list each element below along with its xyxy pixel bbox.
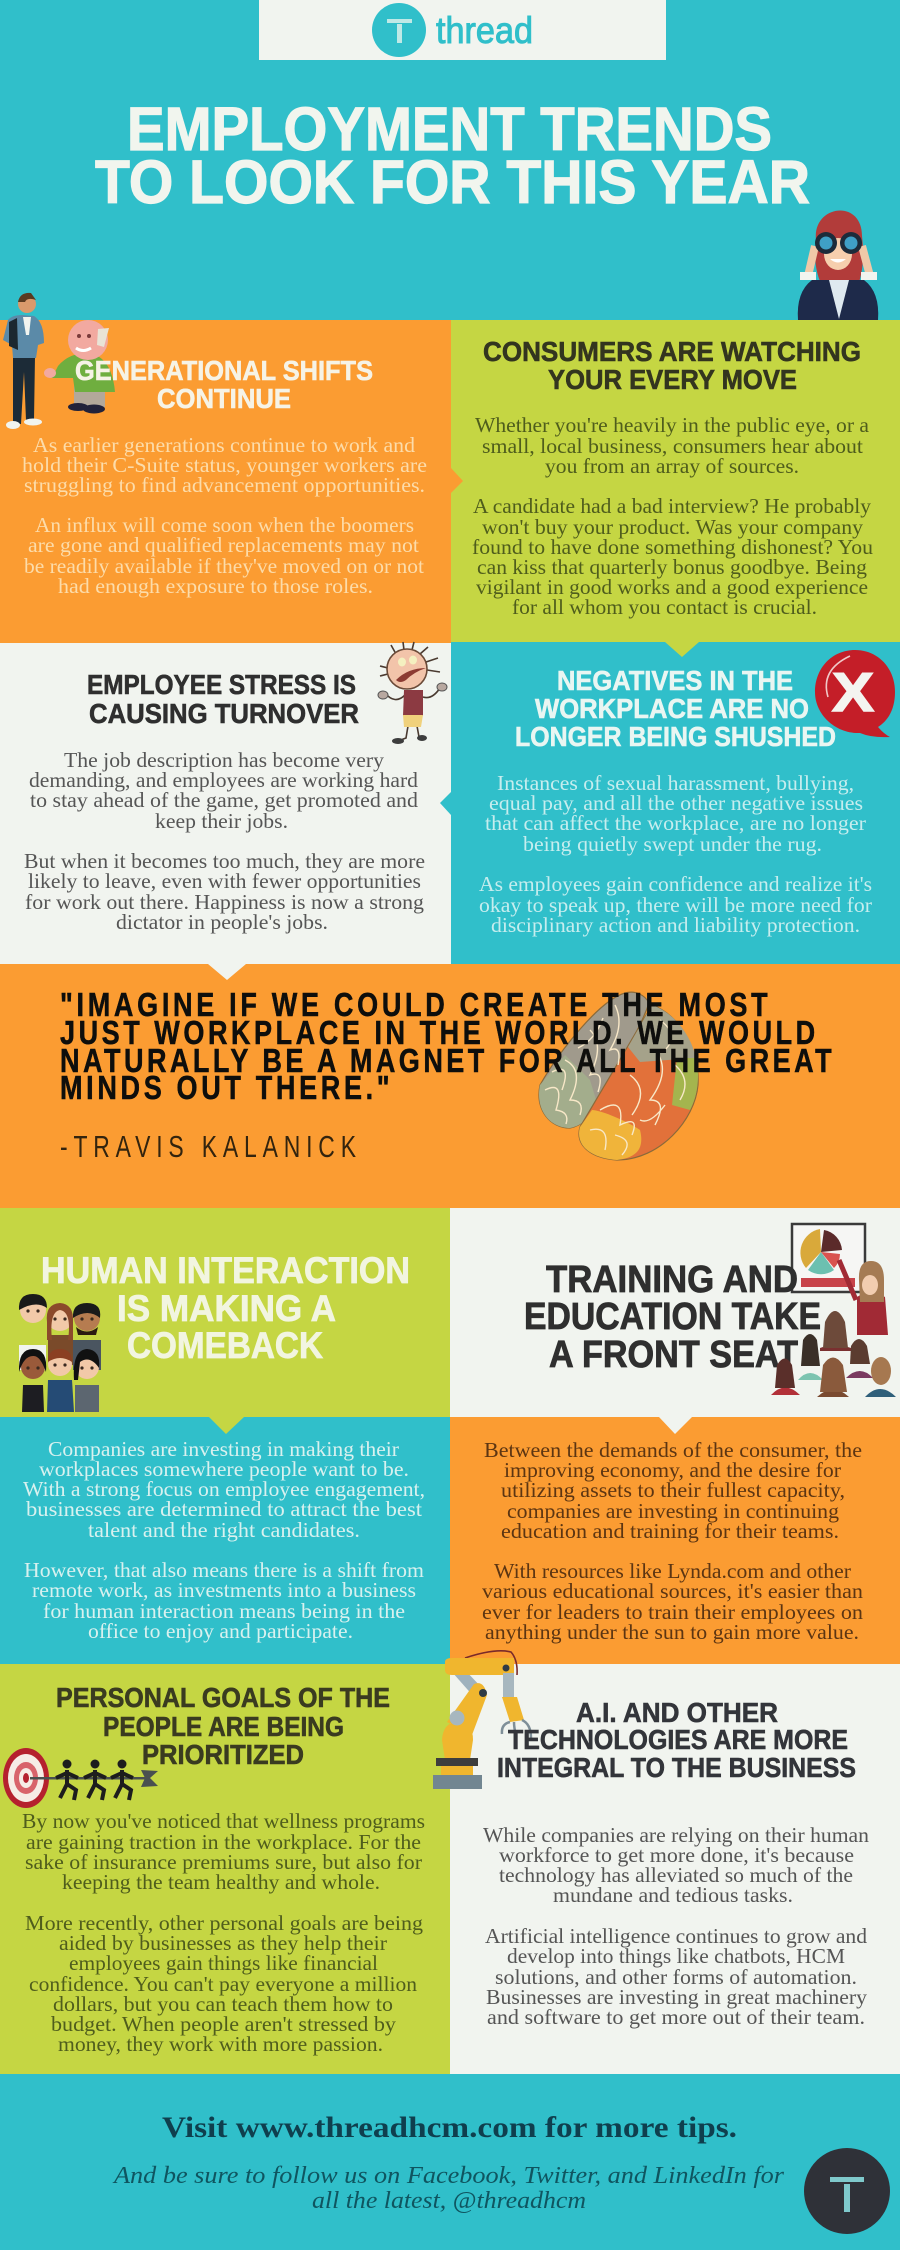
heading: PRIORITIZED bbox=[142, 1739, 304, 1770]
heading bbox=[75, 355, 373, 414]
body text: keeping the team healthy and whole. bbox=[62, 1870, 380, 1894]
body text: aided by businesses as they help their bbox=[59, 1931, 387, 1955]
body text: develop into things like chatbots, HCM bbox=[507, 1944, 845, 1968]
body text: Instances of sexual harassment, bullying, bbox=[497, 771, 854, 795]
heading: EDUCATION TAKE bbox=[524, 1296, 821, 1338]
heading: TECHNOLOGIES ARE MORE bbox=[508, 1724, 848, 1755]
body text: remote work, as investments into a business bbox=[32, 1578, 416, 1602]
body text: solutions, and other forms of automation. bbox=[495, 1965, 857, 1989]
icon: stressed cartoon person bbox=[378, 642, 447, 744]
body text: businesses are determined to attract the best bbox=[26, 1497, 422, 1521]
body text bbox=[23, 1437, 425, 1643]
body text: for work out there. Happiness is now a strong bbox=[25, 890, 425, 914]
body text: be readily available if they've moved on or not bbox=[24, 554, 424, 578]
body text: Whether you're heavily in the public eye, or a bbox=[475, 413, 870, 437]
body text bbox=[479, 771, 872, 937]
body text: Companies are investing in making their bbox=[48, 1437, 399, 1461]
arrow: white pointer bbox=[659, 1417, 692, 1434]
panel: consumers are watching bbox=[451, 320, 900, 642]
social follow text: all the latest, @threadhcm bbox=[312, 2188, 586, 2214]
arrow: green pointer bbox=[209, 1417, 244, 1434]
panel: quote bbox=[0, 964, 900, 1208]
heading: CONTINUE bbox=[157, 383, 291, 414]
body text: More recently, other personal goals are being bbox=[25, 1911, 424, 1935]
body text bbox=[22, 433, 427, 598]
heading bbox=[56, 1682, 390, 1770]
body text: education and training for their teams. bbox=[501, 1519, 839, 1543]
heading: TRAINING AND bbox=[546, 1259, 798, 1301]
panel: footer bbox=[0, 2074, 900, 2250]
body text: for human interaction means being in the bbox=[43, 1599, 405, 1623]
heading: CONSUMERS ARE WATCHING bbox=[483, 336, 861, 367]
icon: thread T logo bbox=[804, 2148, 890, 2234]
heading: A.I. AND OTHER bbox=[576, 1697, 778, 1728]
icon: robot arm bbox=[433, 1651, 531, 1789]
icon: old man in green sweater bbox=[44, 320, 115, 414]
heading bbox=[497, 1697, 856, 1783]
quote text bbox=[60, 988, 832, 1107]
body text: budget. When people aren't stressed by bbox=[51, 2012, 397, 2036]
arrow: orange pointer bbox=[451, 468, 463, 493]
panel: generational shifts bbox=[0, 293, 451, 643]
body text: for all whom you contact is crucial. bbox=[512, 595, 817, 619]
heading: IS MAKING A bbox=[117, 1288, 336, 1329]
body text: sake of insurance premiums sure, but also for bbox=[25, 1850, 422, 1874]
body text: Businesses are investing in great machinery bbox=[486, 1985, 868, 2009]
icon: young man with backpack bbox=[3, 293, 44, 429]
logo: thread bbox=[436, 10, 533, 51]
quote text: MINDS OUT THERE." bbox=[60, 1071, 390, 1107]
heading bbox=[524, 1259, 821, 1376]
body text: won't buy your product. Was your company bbox=[482, 515, 864, 539]
body text: likely to leave, even with fewer opportunities bbox=[28, 869, 421, 893]
body text: workforce to get more done, it's because bbox=[499, 1843, 854, 1867]
body text: As earlier generations continue to work and bbox=[33, 433, 416, 457]
body text: But when it becomes too much, they are more bbox=[24, 849, 425, 873]
heading bbox=[41, 1250, 410, 1366]
body text: are gone and qualified replacements may not bbox=[28, 533, 419, 557]
heading: COMEBACK bbox=[127, 1325, 323, 1366]
panel: human interaction body bbox=[0, 1417, 450, 1665]
body text: that can affect the workplace, are no longer bbox=[485, 811, 866, 835]
heading: YOUR EVERY MOVE bbox=[548, 364, 797, 395]
body text bbox=[483, 1823, 870, 2029]
body text: Between the demands of the consumer, the bbox=[484, 1438, 862, 1462]
body text: employees gain things like financial bbox=[69, 1951, 378, 1975]
arrow: teal pointer bbox=[440, 792, 451, 815]
body text: small, local business, consumers hear about bbox=[482, 434, 863, 458]
body text: companies are investing in continuing bbox=[507, 1499, 840, 1523]
body text: By now you've noticed that wellness programs bbox=[22, 1809, 425, 1833]
quote text: NATURALLY BE A MAGNET FOR ALL THE GREAT bbox=[60, 1044, 832, 1080]
body text bbox=[22, 1809, 425, 2056]
heading: GENERATIONAL SHIFTS bbox=[75, 355, 373, 386]
social follow text bbox=[112, 2163, 785, 2214]
body text: utilizing assets to their fullest capacity, bbox=[501, 1478, 845, 1502]
heading: LONGER BEING SHUSHED bbox=[515, 721, 836, 752]
title: EMPLOYMENT TRENDS bbox=[127, 95, 772, 163]
heading: CAUSING TURNOVER bbox=[89, 698, 359, 729]
body text: money, they work with more passion. bbox=[58, 2032, 383, 2056]
body text: Artificial intelligence continues to grow and bbox=[485, 1924, 868, 1948]
heading: PEOPLE ARE BEING bbox=[103, 1711, 344, 1742]
panel: employee stress bbox=[0, 642, 451, 964]
heading bbox=[87, 669, 359, 729]
body text: anything under the sun to gain more value. bbox=[485, 1620, 859, 1644]
panel: training body bbox=[450, 1417, 900, 1665]
icon: brain bbox=[539, 992, 698, 1160]
panel: training heading bbox=[450, 1208, 900, 1417]
body text: However, that also means there is a shift from bbox=[24, 1558, 424, 1582]
body text: and software to get more out of their team. bbox=[487, 2005, 865, 2029]
heading: A FRONT SEAT bbox=[549, 1334, 798, 1376]
title bbox=[95, 95, 810, 216]
heading bbox=[515, 665, 836, 752]
icon: target with running team on arrow bbox=[3, 1748, 158, 1808]
body text: A candidate had a bad interview? He probably bbox=[473, 494, 872, 518]
title: TO LOOK FOR THIS YEAR bbox=[95, 148, 810, 216]
body text: confidence. You can't pay everyone a million bbox=[29, 1972, 417, 1996]
icon: red speech bubble with X: X bbox=[832, 661, 874, 723]
logo bbox=[259, 0, 666, 60]
body text: technology has alleviated so much of the bbox=[499, 1863, 853, 1887]
icon: red speech bubble with X bbox=[815, 650, 895, 737]
panel: personal goals bbox=[0, 1664, 450, 2074]
body text: to stay ahead of the game, get promoted and bbox=[30, 788, 419, 812]
heading: WORKPLACE ARE NO bbox=[535, 693, 809, 724]
icon: presenter bbox=[839, 1260, 888, 1335]
body text: mundane and tedious tasks. bbox=[553, 1883, 793, 1907]
body text: ever for leaders to train their employees on bbox=[482, 1600, 864, 1624]
body text: dictator in people's jobs. bbox=[116, 910, 328, 934]
body text: talent and the right candidates. bbox=[88, 1518, 360, 1542]
body text: various educational sources, it's easier than bbox=[482, 1579, 864, 1603]
icon: woman with binoculars bbox=[798, 210, 878, 320]
body text: being quietly swept under the rug. bbox=[523, 832, 822, 856]
icon: group of six people bbox=[19, 1294, 101, 1412]
body text: An influx will come soon when the boomers bbox=[35, 513, 414, 537]
body text: equal pay, and all the other negative issues bbox=[489, 791, 863, 815]
arrow: white pointer bbox=[208, 964, 246, 980]
body text: While companies are relying on their human bbox=[483, 1823, 870, 1847]
body text: are gaining traction in the workplace. For the bbox=[26, 1830, 421, 1854]
icon: seated audience bbox=[771, 1311, 896, 1397]
body text: hold their C-Suite status, younger workers are bbox=[22, 453, 427, 477]
body text: The job description has become very bbox=[64, 748, 385, 772]
body text: you from an array of sources. bbox=[545, 454, 799, 478]
body text bbox=[472, 413, 874, 619]
body text: workplaces somewhere people want to be. bbox=[39, 1457, 409, 1481]
icon: presentation board bbox=[792, 1224, 865, 1292]
panel: header bbox=[0, 0, 900, 321]
body text: With resources like Lynda.com and other bbox=[494, 1559, 851, 1583]
panel: AI and technologies bbox=[433, 1651, 900, 2074]
quote attribution: -TRAVIS KALANICK bbox=[60, 1129, 356, 1164]
body text: dollars, but you can teach them how to bbox=[53, 1992, 393, 2016]
heading: HUMAN INTERACTION bbox=[41, 1250, 410, 1291]
body text: found to have done something dishonest? You bbox=[472, 535, 874, 559]
body text: keep their jobs. bbox=[155, 809, 288, 833]
body text: okay to speak up, there will be more need for bbox=[479, 893, 872, 917]
body text: struggling to find advancement opportunities. bbox=[24, 473, 425, 497]
panel: human interaction heading bbox=[0, 1208, 450, 1417]
body text: improving economy, and the desire for bbox=[504, 1458, 841, 1482]
call to action: Visit www.threadhcm.com for more tips. bbox=[162, 2111, 737, 2144]
body text: office to enjoy and participate. bbox=[88, 1619, 353, 1643]
heading: INTEGRAL TO THE BUSINESS bbox=[497, 1752, 856, 1783]
heading: PERSONAL GOALS OF THE bbox=[56, 1682, 390, 1713]
body text: As employees gain confidence and realize it's bbox=[479, 872, 872, 896]
panel: negatives in the workplace bbox=[451, 642, 900, 964]
arrow: green pointer bbox=[665, 642, 699, 657]
body text: had enough exposure to those roles. bbox=[58, 574, 373, 598]
body text: vigilant in good works and a good experience bbox=[476, 575, 868, 599]
body text bbox=[482, 1438, 864, 1644]
body text: With a strong focus on employee engagement, bbox=[23, 1477, 425, 1501]
quote text: JUST WORKPLACE IN THE WORLD. WE WOULD bbox=[60, 1016, 815, 1052]
body text: disciplinary action and liability protection. bbox=[491, 913, 860, 937]
heading: EMPLOYEE STRESS IS bbox=[87, 669, 356, 700]
heading bbox=[483, 336, 861, 395]
quote text: "IMAGINE IF WE COULD CREATE THE MOST bbox=[60, 988, 768, 1024]
heading: NEGATIVES IN THE bbox=[557, 665, 793, 696]
social follow text: And be sure to follow us on Facebook, Twitter, and LinkedIn for bbox=[112, 2163, 785, 2189]
body text: demanding, and employees are working hard bbox=[29, 768, 419, 792]
body text bbox=[24, 748, 425, 934]
body text: can kiss that quarterly bonus goodbye. Being bbox=[477, 555, 868, 579]
